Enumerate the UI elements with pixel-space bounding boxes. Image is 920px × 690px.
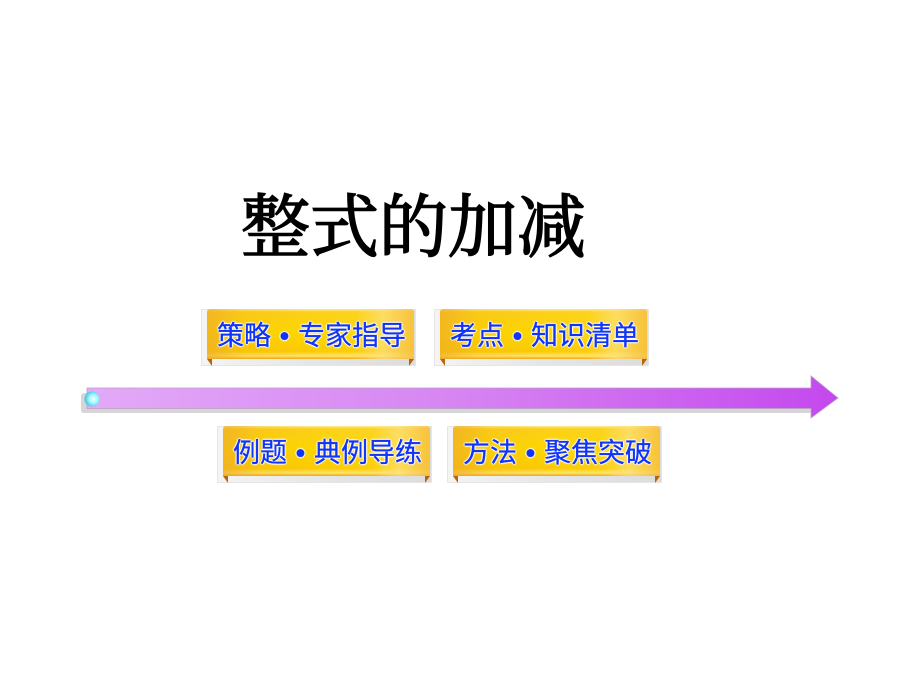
button: examples: [217, 426, 432, 483]
button: strategy: 策略 专家指导: [217, 321, 406, 351]
title: 整式的加减: [241, 172, 586, 271]
button: methods: [447, 426, 662, 483]
button: key points: •: [513, 321, 522, 351]
button: methods: •: [526, 438, 535, 468]
button: methods: 方法 聚焦突破: [463, 438, 652, 468]
button: strategy: [201, 309, 416, 366]
button: strategy: •: [280, 321, 289, 351]
button: key points: 考点 知识清单: [450, 321, 639, 351]
button: examples: 例题 典例导练: [233, 438, 422, 468]
button: examples: •: [296, 438, 305, 468]
button: key points: [434, 309, 649, 366]
